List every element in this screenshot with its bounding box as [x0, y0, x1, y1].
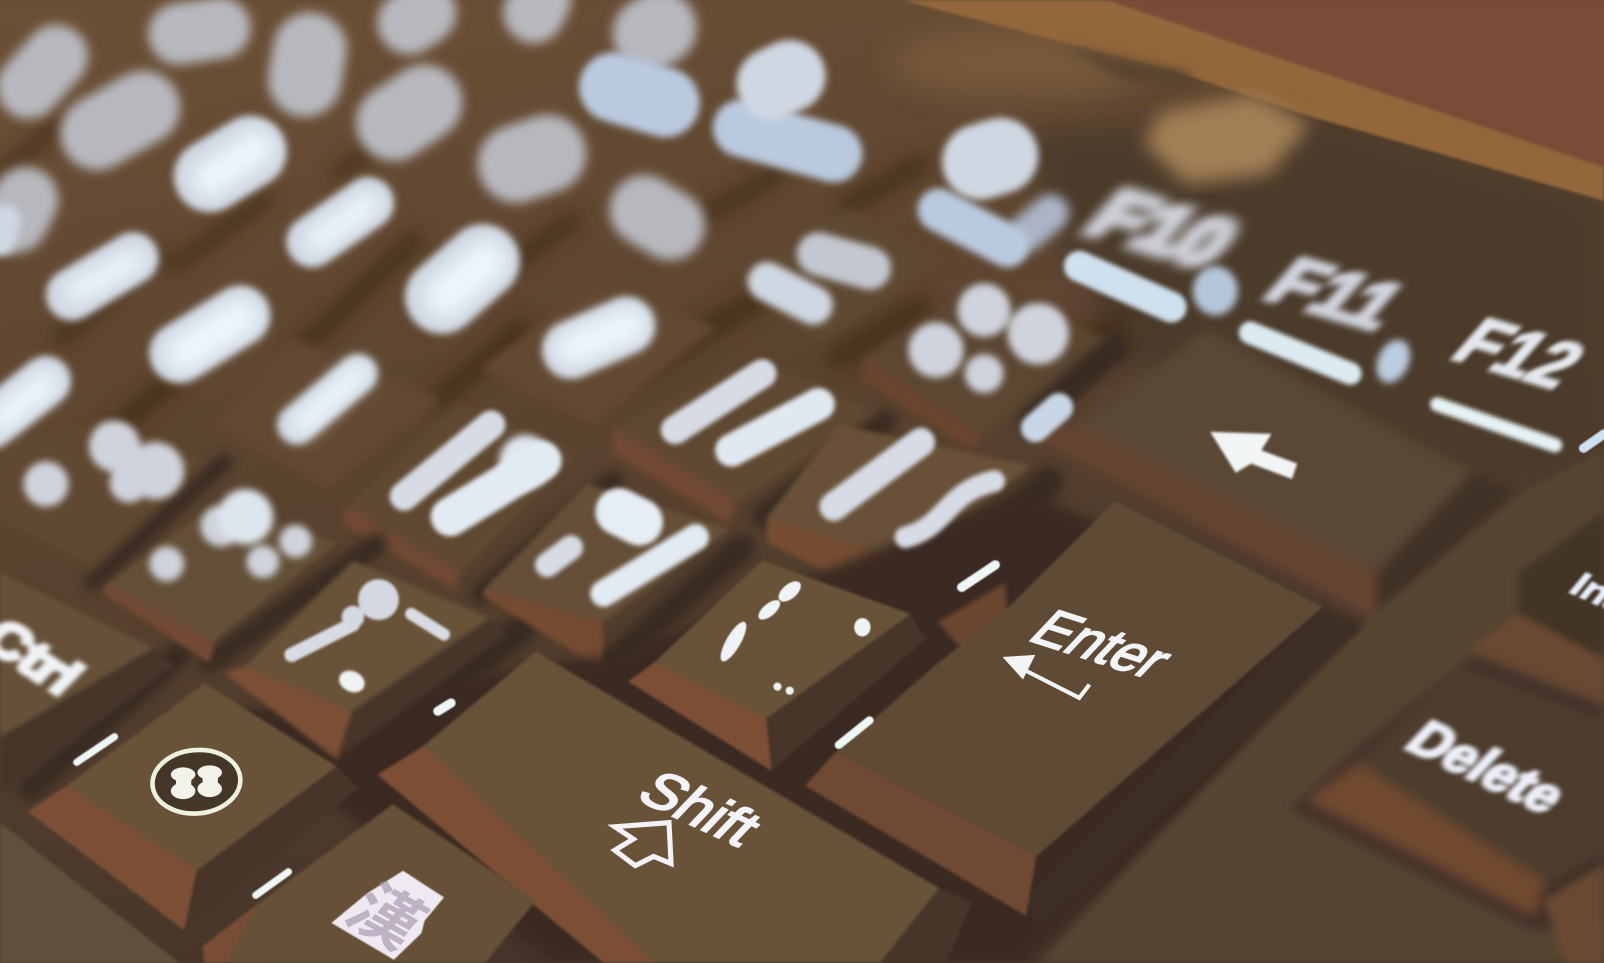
key: bottom right corner	[1544, 865, 1604, 963]
legend: Hanja key block: 漢	[333, 873, 438, 961]
mid focus legends	[24, 266, 1417, 581]
key: windows	[28, 684, 358, 930]
mid keys with side faces	[102, 425, 1030, 670]
dark gaps between far keys	[0, 123, 1115, 450]
icon: backspace arrow	[1210, 432, 1297, 479]
legend: F10: F10	[1071, 175, 1255, 282]
colon key legends	[716, 577, 871, 695]
key: bottom left	[0, 823, 179, 963]
legend: F11: F11	[1250, 243, 1422, 343]
far bright legends	[0, 76, 1000, 425]
icon: windows logo	[150, 746, 243, 817]
legend: F12: F12	[1437, 305, 1601, 402]
key: backspace	[1033, 330, 1516, 619]
dark gaps between mid keys	[31, 348, 1115, 788]
key: ctrl	[0, 573, 174, 796]
far blurred key: esc glow	[1144, 94, 1309, 184]
legend: Delete: Delete	[1394, 711, 1579, 824]
mid focus capsule legends	[404, 266, 1555, 594]
lower gap base	[205, 491, 1371, 963]
key: colon	[628, 561, 926, 770]
far grey legends	[15, 0, 1051, 233]
top glow on frame	[890, 26, 1156, 389]
legend: Shift: Shift	[625, 761, 774, 857]
key: delete	[1289, 655, 1604, 931]
lower right frame bar	[1038, 450, 1604, 963]
light slits between keys	[77, 434, 1604, 895]
icon: shift arrow	[615, 823, 671, 866]
key: hanja	[203, 804, 536, 963]
far blue legends	[614, 87, 1008, 246]
legend highlights	[0, 149, 629, 425]
icon: enter arrow head	[1002, 655, 1035, 679]
slash key legends	[292, 579, 444, 696]
dark gap right of enter	[1023, 607, 1364, 926]
legend: Enter: Enter	[1017, 600, 1186, 689]
icon: enter arrow	[1023, 669, 1089, 698]
key: enter notch	[938, 583, 1008, 655]
key: shift	[377, 652, 972, 963]
keyboard rim	[902, 0, 1604, 201]
key: insert	[1467, 512, 1604, 707]
key row: upper soft keys	[0, 210, 1115, 589]
right frame panel	[1023, 113, 1604, 481]
dark rim streak	[1064, 46, 1197, 90]
desk surface	[1108, 0, 1604, 167]
key: slash	[225, 561, 506, 759]
key: enter	[805, 501, 1323, 916]
